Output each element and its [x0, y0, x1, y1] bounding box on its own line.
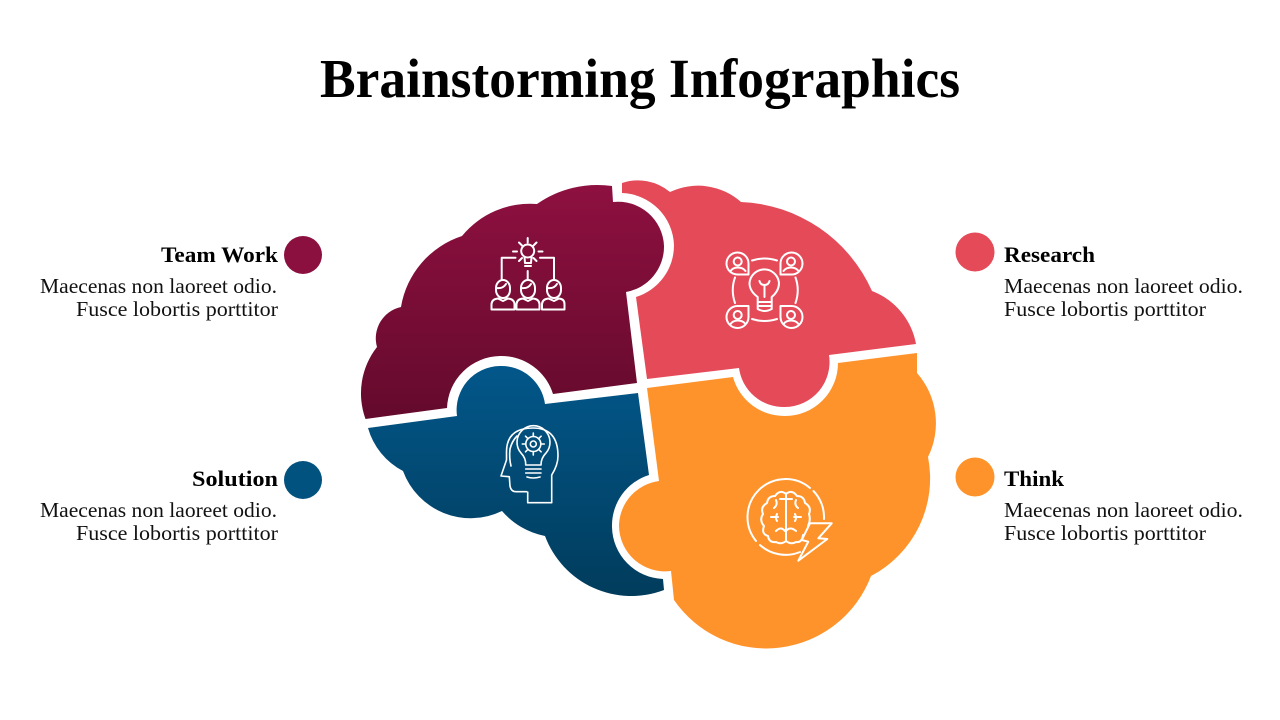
label: think: Maecenas non laoreet odio.	[1004, 498, 1243, 522]
label: solution	[40, 461, 322, 545]
label: research: Research	[1004, 242, 1095, 267]
label: think	[956, 458, 1243, 545]
title: Brainstorming Infographics	[320, 48, 960, 109]
icon: brain with lightning	[748, 479, 832, 561]
label: research: Fusce lobortis porttitor	[1004, 297, 1206, 321]
label: solution: Fusce lobortis porttitor	[76, 521, 278, 545]
label: research	[956, 232, 1243, 321]
icon: team with light bulb	[492, 238, 564, 310]
puzzle piece: solution	[368, 366, 664, 596]
label: think: Fusce lobortis porttitor	[1004, 521, 1206, 545]
puzzle piece: team work	[361, 185, 664, 419]
puzzle piece: research	[622, 180, 916, 407]
label: solution: Maecenas non laoreet odio.	[40, 498, 277, 522]
label: team work: Team Work	[161, 242, 278, 267]
label: team work: Fusce lobortis porttitor	[76, 297, 278, 321]
label: solution: Solution	[192, 466, 279, 491]
label: research: Maecenas non laoreet odio.	[1004, 274, 1243, 298]
icon: head with gear bulb	[501, 426, 558, 503]
label: team work	[40, 236, 322, 321]
label: team work: Maecenas non laoreet odio.	[40, 274, 277, 298]
puzzle piece: think	[619, 353, 936, 648]
icon: research bulb with people	[727, 253, 802, 328]
label: think: Think	[1004, 466, 1064, 491]
